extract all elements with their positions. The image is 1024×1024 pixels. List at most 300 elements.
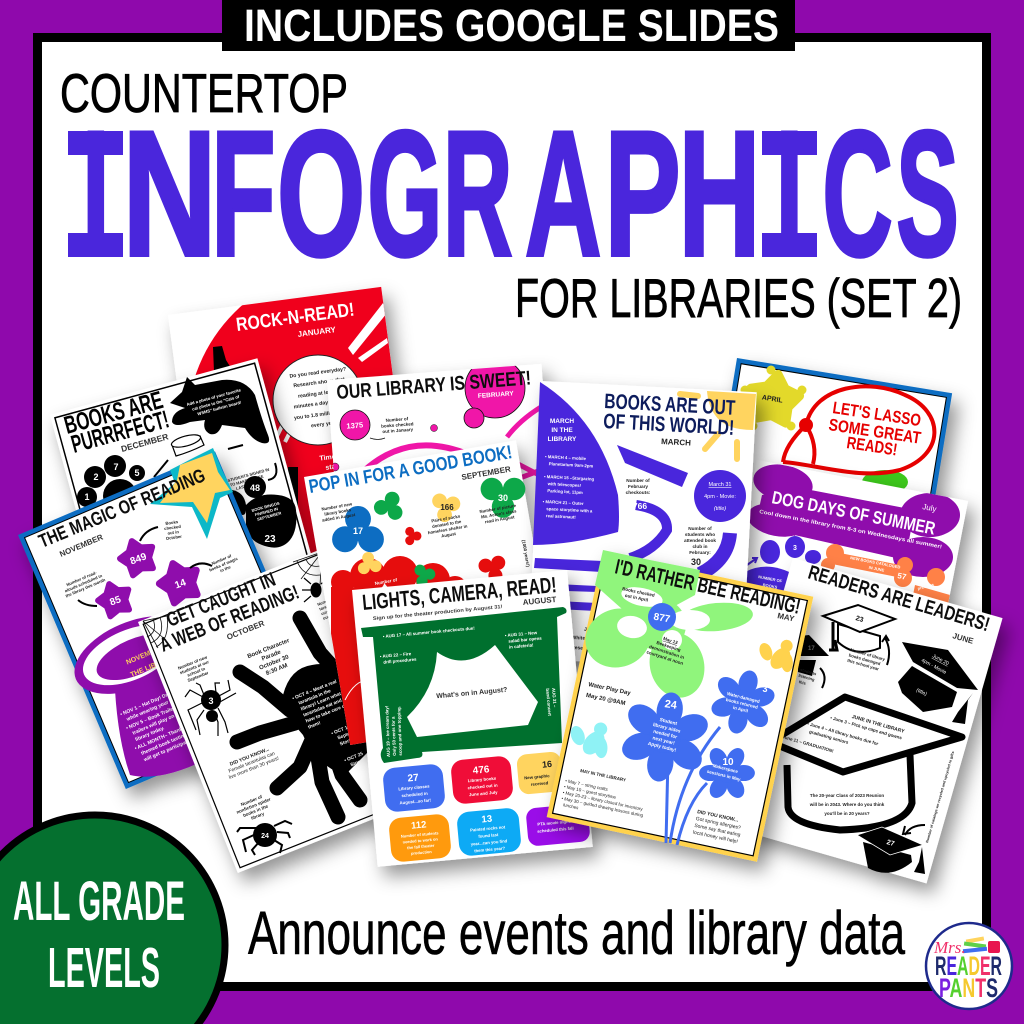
card: the magic of reading November: 849 [129,551,149,567]
card: the magic of reading November: October [166,534,183,541]
large graduation cap: June 11 – GRADUATION! [782,734,835,754]
black movie cap: 4pm - Movie [920,658,947,676]
card: pop in for a good book September: SEPTEMBER [461,465,512,482]
data tiles: Library classes [398,784,430,791]
card: get caught in a web of reading October: school in [186,666,206,678]
data tiles: the fall theater [407,843,435,850]
card: get caught in a web of reading October: tarantulas [318,600,339,612]
large graduation cap: The 20-year Class of 2023 Reunion [810,793,884,798]
green badge: all grade levels: LEVELS [48,936,160,1000]
rocket text: space storytime with a [546,506,593,514]
card: pop in for a good book September: 17 [353,526,363,536]
data tiles: found last [478,832,499,839]
data tiles: 476 [472,764,490,777]
card: get caught in a web of reading October: live more than 30 years! [228,756,280,781]
data tiles: them this year? [474,845,506,853]
card: pop in for a good book September: August [441,531,457,539]
spider webs [143,552,322,648]
card: get caught in a web of reading October: September [187,670,210,683]
data tiles: year...can you find [471,838,508,847]
magic hat: • NOV 1 – Hat Day! Dress up [119,686,183,718]
blue flowers and stems: 24 [664,698,678,712]
graduation cap 23 [823,605,895,652]
card: get caught in a web of reading October: • OCT 15 – [331,722,355,737]
top banner: INCLUDES GOOGLE SLIDES [244,0,779,51]
green flower: 877 [653,612,671,625]
data tiles: 16 [542,759,552,770]
purr title: DECEMBER [120,431,169,454]
sheriff star [741,366,806,430]
May in the library list: • May 20-23 – library closed for inventory [562,790,644,812]
May in the library list: lunches [563,802,580,810]
stripes [534,558,603,611]
card: pop in for a good book September: Number of picture [479,503,517,514]
blue paws [746,536,821,590]
card: books are out of this world March: 766 [633,501,647,511]
card: get caught in a web of reading October: our [322,614,330,621]
magic hat [63,600,207,777]
card: books are out of this world March: checkouts: [626,490,651,495]
card: rock-n-read January: ROCK-N-READ! [235,300,356,336]
rocket text: LIBRARY [548,436,577,443]
data tiles: New graphic [524,773,550,780]
orbit arcs [617,445,730,574]
card: our library is sweet February [323,363,560,480]
data tiles: 27 [407,773,420,785]
blue flowers and stems: sessions in May [706,769,742,782]
May in the library list: • May 30 – guided drawing lessons during [561,796,644,818]
title: infographics: G [367,95,442,294]
magic hat: NOVEMBER IN [125,641,174,666]
blue flowers and stems [612,662,783,845]
magic hat: while wearing your hat! [125,695,180,723]
black movie cap: (title) [915,687,928,698]
card: pop in for a good book September: library books [324,507,352,517]
magic hat: • ALL MONTH– Thanksgiving- [134,719,201,752]
large graduation cap: • June 3 – Pick up caps and gowns [830,715,903,741]
title: infographics: F [211,94,276,293]
card: let's lasso some great reads April [692,358,952,668]
blue flowers and stems: library aides [652,722,681,735]
card: pop in for a good book September: Number of new [321,501,353,512]
lights title: Sign up for the theater production by August 31! [373,604,503,622]
card: readers are leaders June: this [798,679,807,686]
card: dog days of summer July: July [922,502,937,514]
card: books are out of this world March: February: [689,550,711,555]
blue flowers and stems: in April [732,705,749,713]
card: the magic of reading November: books of magic [208,556,239,573]
card: get caught in a web of reading October: how to take care of [305,703,348,725]
card: dog days of summer July: BOOKS [762,582,778,590]
title: infographics: I [82,94,110,293]
card: the magic of reading November: Number of read- [66,570,98,587]
graduation cap 23: 23 [855,615,864,624]
card: I'd rather bee reading May [547,550,813,862]
web title: A WEB OF READING! [157,581,302,657]
stage text: in cafeteria! [509,642,534,650]
card: books are out of this world March: March 31 [709,482,731,488]
card: get caught in a web of reading October: September [337,727,362,741]
data tiles: 112 [411,819,427,832]
card: dog days of summer July: previous [917,582,935,591]
data tiles: PTA movie nights [537,819,573,827]
card: books are purrrfect December: 48 [250,483,260,493]
card: the magic of reading November: Books [165,519,179,526]
readers title: JUNE [951,631,975,646]
black stats: TO MAKERSPACE [229,473,264,488]
stage text [380,625,558,757]
card: books are purrrfect December: Add a photo of your favorite [186,387,242,407]
card: books are out of this world March: MARCH [661,437,691,448]
yellow sun corner [680,391,756,459]
sweet title: OUR LIBRARY IS SWEET! [336,367,532,404]
blue flowers and stems: Student [659,717,678,727]
large graduation cap [770,697,962,830]
march title: OF THIS WORLD! [603,410,735,440]
card: let's lasso some great reads April: APRIL [761,394,784,405]
card: pop in for a good book September [302,440,536,765]
large graduation cap: you'll be in 20 years? [824,811,870,816]
rocket shape [533,382,619,545]
data tiles: scheduled this fall [537,825,574,834]
card: the magic of reading November: checked [164,524,182,531]
May in the library list [560,768,744,845]
card: books are purrrfect December: 2 [93,472,99,482]
web title: OCTOBER [225,619,266,642]
purr title: BOOKS ARE [61,386,166,440]
card: pop in for a good book September: read in August [484,514,515,524]
card: our library is sweet February: books checked [381,421,414,429]
card: books are out of this world March: 30 [691,557,701,567]
card: get caught in a web of reading October: Number of [240,794,263,807]
popcorn box [331,556,464,745]
data tiles: June and July [469,790,498,797]
small hanging spider [302,578,328,602]
paw print [77,455,145,513]
card: get caught in a web of reading October: currently in [320,603,343,616]
magic hat: trailers will play on the [132,710,184,737]
card: let's lasso some great reads April: LET'S LASSO [831,398,922,430]
card: dog days of summer July: NEW BOOKS CATALOGED [850,555,901,570]
card: books are out of this world March: attended book [684,538,716,543]
web title: GET CAUGHT IN [164,569,279,632]
stage text: • AUG 31 – New [505,630,538,638]
card: our library is sweet February: Number of [385,416,409,423]
black stats: STUDENTS SIGNED IN [227,467,270,483]
card: get caught in a web of reading October: Storytime [339,734,362,747]
card: books are out of this world March: Number of [626,478,650,483]
card: the magic of reading November: in the [219,564,232,573]
stage text: AUG 19 – Ice cream day! [384,705,391,757]
card: books are out of this world March: Research [571,645,594,652]
card: books are out of this world March: club in [692,544,708,549]
rocket text: • MARCH 4 – mobile [545,454,587,461]
stage text: • AUG 22 – Fire [380,651,412,659]
card: the magic of reading November: alouds scheduled in [64,573,103,593]
card: pop in for a good book September: Ms. Acton's class [481,508,517,519]
stage text: What's on in August? [436,687,508,700]
card: dog days of summer July: IN JUNE [868,565,885,573]
blue flowers and stems: 3 [762,684,768,694]
card: pop in for a good book September: homeless shelter in [427,523,468,535]
small spider with 3: 3 [208,696,214,706]
card: I'd rather bee reading May: Beekeeping [656,640,682,653]
card: books are purrrfect December: 5 [134,468,140,478]
stage text: scoop and one topping. [396,706,403,756]
green badge: all grade levels: ALL GRADE [13,869,185,932]
May in the library list: Some say that eating [694,823,741,838]
card: get caught in a web of reading October: October 30 [258,654,290,672]
card: readers are leaders June [717,558,1003,883]
card: I'd rather bee reading May: Water Play Day [588,682,632,697]
card: get caught in a web of reading October: 8:30 AM [265,663,289,677]
card: readers are leaders June: Number of library [850,647,886,662]
orange bones [821,544,950,602]
magic hat: • NOV 5 – Book Trailer Day [125,701,186,732]
card: let's lasso some great reads April: READS! [845,433,899,459]
stage text: • AUG 17 – All summer book checkouts due! [383,625,475,639]
May in the library list: local honey will help! [692,830,738,845]
card: books are purrrfect December: SEPTEMBER [256,510,282,522]
card: I'd rather bee reading May: courtyard at noon [646,649,684,666]
web title [157,569,302,657]
teal and yellow star [150,448,233,539]
card: pop in for a good book September: Number of [374,577,398,586]
card: get caught in a web of reading October: Parade [261,649,282,663]
blue flowers and stems: Makerspace [712,763,739,774]
card: get caught in a web of reading October: • OCT 4 – Meet a real [292,679,338,702]
May in the library list: • May 10 – guest storytime [564,784,617,800]
black movie cap [898,642,978,724]
graduation cap 27: 27 [886,839,895,848]
card: books are out of this world March: (title) [714,506,726,512]
card: rock-n-read January: you to 1.8 million words [294,408,353,421]
logo: Mrs. Reader Pants: READER [935,951,1002,981]
title: infographics: P [605,94,681,293]
bee title: MAY [777,611,796,624]
magic hat: THE LIBRARY [130,654,176,679]
data tiles: August...so far! [399,797,432,805]
blue flowers and stems: needed for [652,729,678,741]
graduation cap 17 [798,635,829,676]
spider with 24 [237,821,292,855]
card: get caught in a web of reading October: Book Character [247,638,291,660]
card: get caught in a web of reading October: library [250,811,265,821]
card: let's lasso some great reads April: SOME GREAT [827,415,923,448]
title: infographics: C [822,95,893,293]
lights title [361,572,558,622]
bee title: I'D RATHER BEE READING! [613,555,802,619]
red lasso [783,386,934,473]
logo: Mrs. Reader Pants: Mrs. [933,938,966,957]
card: the magic of reading November: 14 [173,577,188,591]
title: infographics: H [679,94,760,293]
stage text: Only 50 cents for a [391,716,397,756]
heading: countertop: COUNTERTOP [60,62,348,124]
lights title: AUGUST [522,595,557,607]
card: dog days of summer July: 57 [897,571,908,582]
rocket text: Parking lot, 11pm [547,488,583,495]
black stats [227,467,273,493]
black stats: LAST MONTH [235,479,262,491]
stage text: AUG 31 – [551,688,558,708]
magic hat: library today. [134,725,166,743]
green badge: all grade levels [0,815,225,1024]
rocket text: IN THE [551,427,573,434]
data tiles: Number of students [401,830,439,839]
card: our library is sweet February: FEBRUARY [478,390,515,400]
spider with 24: 24 [261,833,269,840]
card: rock-n-read January: reading at least 20 [298,388,344,400]
data tiles: needed to work on [402,836,439,845]
card: rock-n-read January: minutes a day exposes [293,397,351,410]
card: pop in for a good book September: 166 [440,503,454,512]
card: lights, camera, read August [352,570,593,867]
card: get caught in a web of reading October: students at our [179,659,210,675]
magic title: THE MAGIC OF READING [36,465,208,553]
data tiles: Library books [468,776,497,783]
card: dog days of summer July: NUMBER OF [758,574,783,584]
card: pop in for a good book September: added in August [322,512,356,523]
magic hat: will get to participate [142,738,191,764]
card: books are out of this world March: February [628,484,648,489]
card: pop in for a good book September: (1000 years!) [521,539,531,568]
card: books are out of this world March: Number of [688,526,712,531]
popcorn clusters [332,478,525,588]
purr title [61,386,172,459]
card: dog days of summer July [746,460,982,608]
data tiles: checked out in [467,783,498,790]
card: books are purrrfect December: 23 [264,534,276,545]
rocket text: Planetarium 9am-2pm [549,461,594,469]
card: I'd rather bee reading May: out in April [624,593,649,603]
green flower [577,550,754,704]
purr title: PURRRFECT! [68,405,172,459]
small spider with 3 [185,680,236,736]
card: our library is sweet February: 1375 [346,420,363,431]
title: infographics: S [896,95,959,294]
march title: BOOKS ARE OUT [604,390,736,420]
card: readers are leaders June: students [800,667,818,677]
card: rock-n-read January: Do you read everyday? [289,366,347,380]
card: books are purrrfect December: cat photo to the "Cats of [191,394,240,412]
card: get caught in a web of reading October: books in the [242,803,269,818]
card: dog days of summer July: Cool down in the library from 8-3 on Wednesdays all summer! [759,509,943,551]
card: get caught in a web of reading October: nonfiction spider [236,797,272,815]
card: get caught in a web of reading October: Female tarantulas can [228,751,276,775]
pop title: POP IN FOR A GOOD BOOK! [307,442,514,498]
purple bone [744,460,960,577]
card: get caught in a web of reading October: library! Learn what [300,691,343,712]
card: get caught in a web of reading October: Storytime [350,755,373,768]
logo: Mrs. Reader Pants [926,923,1012,1009]
large graduation cap: JUNE IN THE LIBRARY [851,714,906,735]
card: get caught in a web of reading October: tarantula in the [298,688,332,706]
card: rock-n-read January [165,286,410,554]
card: the magic of reading November: the library this month [65,577,106,598]
card: readers are leaders June: Number of catalogs we recycled and upcycled to gifts [925,751,955,843]
blue flowers and stems: next year! [652,735,676,747]
card: the magic of reading November: 85 [108,594,123,608]
card: the magic of reading November: Number of [211,553,233,566]
black cat [170,377,269,443]
cat bowl [170,432,204,456]
card: get caught in a web of reading October: Number [317,597,333,607]
title: infographics: N [122,95,217,294]
May in the library list: MAY IN THE LIBRARY [580,768,626,783]
card: books are purrrfect December: 1 [84,492,90,502]
May in the library list: Got spring allergies? [695,816,741,831]
card: I'd rather bee reading May: Books checked [622,586,655,598]
title: infographics: A [525,95,601,294]
card: books are purrrfect December: 7 [113,462,119,472]
card: readers are leaders June: listening [798,673,816,682]
card: books are out of this world March [527,381,757,670]
blue flowers and stems: Water-damaged [726,691,761,704]
card: dog days of summer July: 3 [793,545,797,552]
stage text: salad bar opens [508,636,542,644]
blue flowers and stems: 10 [722,757,734,768]
card: the magic of reading November: NOVEMBER [58,532,105,559]
data tiles: 13 [481,814,493,826]
card: rock-n-read January: every year! [311,420,339,429]
title: infographics [68,94,959,294]
card: get caught in a web of reading October: Number of new [177,654,208,671]
card: get caught in a web of reading October: DID YOU KNOW... [229,746,271,768]
purple stars with numbers [94,535,204,619]
card: rock-n-read January: start [325,463,342,472]
stage text: drill procedures [383,657,417,665]
card: get caught in a web of reading October: tarantulas eat and [302,698,343,718]
large spider [237,618,385,817]
data tiles: scheduled in [401,791,428,798]
data tiles: production [411,849,433,856]
card: get caught in a web of reading October: them! [307,720,322,731]
May in the library list: • May 7 – string crafts [565,778,609,792]
card: pop in for a good book September: 30 [498,493,508,503]
card: pop in for a good book September: Pairs of socks [431,513,461,523]
card: books are purrrfect December [50,358,331,683]
title: infographics: O [277,94,365,293]
rocket text: with telescopes! [547,481,582,488]
graduation cap 27 [857,825,925,874]
magic hat: themed book tasting for all [140,726,202,757]
card: books are out of this world March: June [584,627,596,633]
data tiles [382,751,591,863]
title: infographics: I [776,94,803,293]
black movie cap: June 20 [931,653,950,667]
bees [755,637,796,674]
data tiles: Painted rocks not [470,824,506,833]
bee title [613,555,802,624]
card: our library is sweet February: out in January [382,427,414,434]
card: the magic of reading November: out in [167,529,180,536]
card: I'd rather bee reading May: demonstration in [649,644,685,660]
green stage curtain [361,607,567,763]
card: get caught in a web of reading October: • OCT 25 [344,751,364,764]
rocket text: real astronaut! [546,513,576,520]
rocket text: • MARCH 21 – Outer [543,499,584,506]
rocket text [542,418,596,521]
card: I'd rather bee reading May: May 20 @9AM [585,693,626,707]
card: rock-n-read January: JANUARY [297,325,337,339]
graduation cap 17: 17 [808,646,815,652]
march title [603,390,736,440]
large graduation cap: • June 4 – All library books due for [807,721,879,746]
rocket text: • MARCH 15 –Stargazing [544,474,595,482]
card: rock-n-read January: Time to [319,452,345,463]
large graduation cap: graduating seniors [809,729,849,745]
